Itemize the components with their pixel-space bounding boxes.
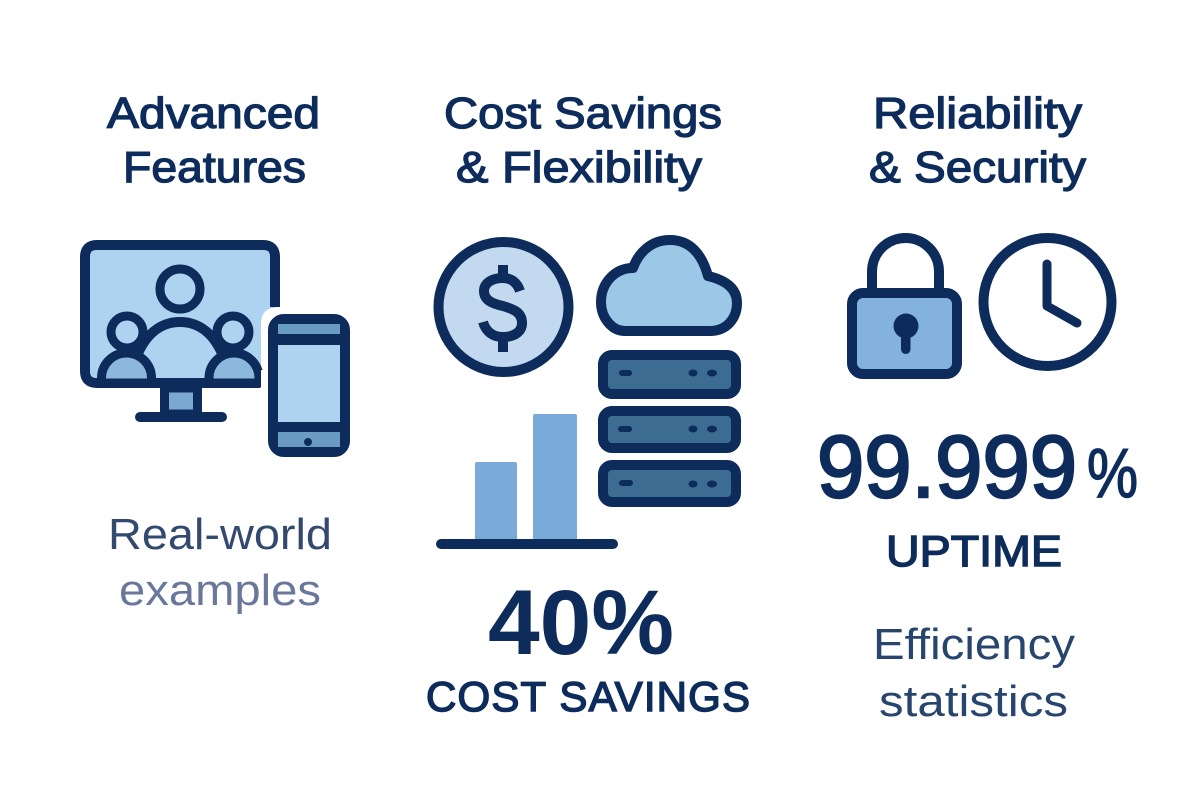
caption: efficiency statistics: Efficiency xyxy=(873,620,1075,669)
heading: reliability and security: Reliability xyxy=(873,89,1082,138)
icon: clock xyxy=(984,238,1112,366)
panel: reliability and security xyxy=(817,89,1138,726)
heading: reliability and security xyxy=(869,89,1086,192)
statistic: 99.999% uptime: % xyxy=(1087,434,1138,512)
heading: cost savings and flexibility: & Flexibility xyxy=(456,143,702,192)
chart: rising bars xyxy=(436,414,618,549)
statistic: 40% cost savings: 40% xyxy=(488,572,674,674)
icon: smartphone xyxy=(273,319,345,452)
heading: cost savings and flexibility: Cost Savings xyxy=(444,89,722,138)
caption: real-world examples xyxy=(108,510,332,615)
icon: server stack xyxy=(603,355,736,502)
statistic: 40% cost savings: COST SAVINGS xyxy=(426,673,750,720)
statistic: 99.999% uptime: UPTIME xyxy=(886,527,1062,576)
caption: real-world examples: examples xyxy=(119,566,321,615)
icon: dollar coin xyxy=(438,242,568,372)
heading: advanced features: Features xyxy=(123,143,306,192)
heading: advanced features xyxy=(107,89,320,192)
caption: efficiency statistics xyxy=(873,620,1075,726)
statistic: 99.999% uptime xyxy=(817,417,1138,576)
heading: reliability and security: & Security xyxy=(869,143,1086,192)
icon: padlock xyxy=(852,238,957,374)
statistic: 40% cost savings xyxy=(426,572,750,720)
panel: cost savings and flexibility xyxy=(426,89,750,720)
caption: real-world examples: Real-world xyxy=(108,510,332,559)
heading: cost savings and flexibility xyxy=(444,89,722,192)
icon: video conference monitor xyxy=(85,245,282,422)
heading: advanced features: Advanced xyxy=(107,89,320,138)
icon: cloud xyxy=(601,240,737,331)
statistic: 99.999% uptime: 99.999 xyxy=(817,417,1077,516)
panel: advanced features xyxy=(85,89,345,615)
caption: efficiency statistics: statistics xyxy=(879,677,1068,726)
